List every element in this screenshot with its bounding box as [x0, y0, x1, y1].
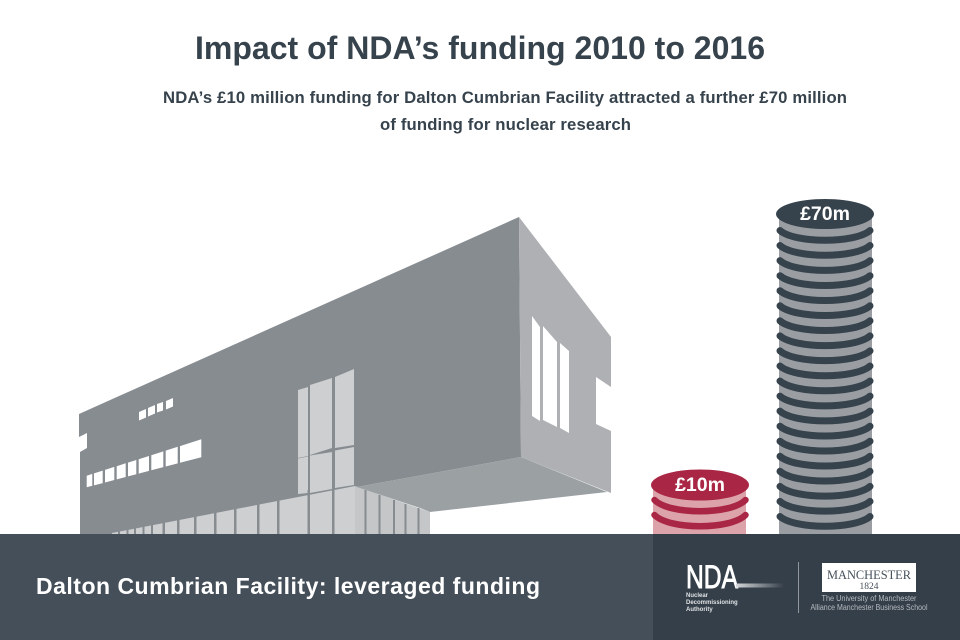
label £70m: £70m — [800, 203, 850, 225]
University of Manchester logo — [810, 563, 928, 612]
NDA logo: Nuclear — [686, 593, 709, 599]
subtitle text block: NDA’s £10 million funding for Dalton Cumbrian Facility attracted a further £70 million — [163, 88, 847, 107]
glazing mullions — [118, 486, 420, 534]
NDA logo: Authority — [686, 607, 713, 613]
coin stack: £70m — [776, 199, 874, 535]
red stack body — [653, 485, 746, 535]
footer band — [0, 534, 960, 640]
large glazed panel — [298, 369, 354, 494]
NDA logo: NDA — [686, 559, 739, 595]
logo divider — [798, 562, 799, 613]
small upper windows — [139, 398, 173, 420]
building illustration — [79, 217, 611, 534]
red coin edges — [654, 500, 746, 526]
footer left panel — [0, 534, 653, 640]
building front face — [79, 217, 521, 534]
coin stack: £10m — [651, 470, 749, 535]
NDA logo: Decommissioning — [686, 600, 738, 606]
dark coin edges — [780, 230, 870, 526]
subtitle text block: of funding for nuclear research — [380, 115, 631, 134]
ground floor glazing — [112, 486, 355, 534]
University of Manchester logo: MANCHESTER — [827, 567, 911, 582]
building underside — [357, 457, 607, 512]
University of Manchester logo: Alliance Manchester Business School — [810, 603, 928, 612]
University of Manchester logo: 1824 — [860, 582, 879, 592]
footer right panel — [653, 534, 960, 640]
building right face — [519, 217, 611, 493]
footer caption: Dalton Cumbrian Facility: leveraged funding — [36, 573, 540, 599]
red top coin — [651, 470, 749, 500]
University of Manchester logo: The University of Manchester — [822, 594, 917, 603]
title: Impact of NDA’s funding 2010 to 2016 — [195, 30, 765, 66]
right face windows — [532, 316, 569, 433]
dark top coin — [776, 199, 874, 229]
subtitle text block — [163, 88, 847, 134]
NDA logo — [686, 559, 784, 613]
ground floor glazing, side — [355, 486, 430, 534]
long window strip — [87, 439, 201, 487]
grey stack body — [779, 214, 872, 535]
label £10m: £10m — [675, 474, 725, 496]
